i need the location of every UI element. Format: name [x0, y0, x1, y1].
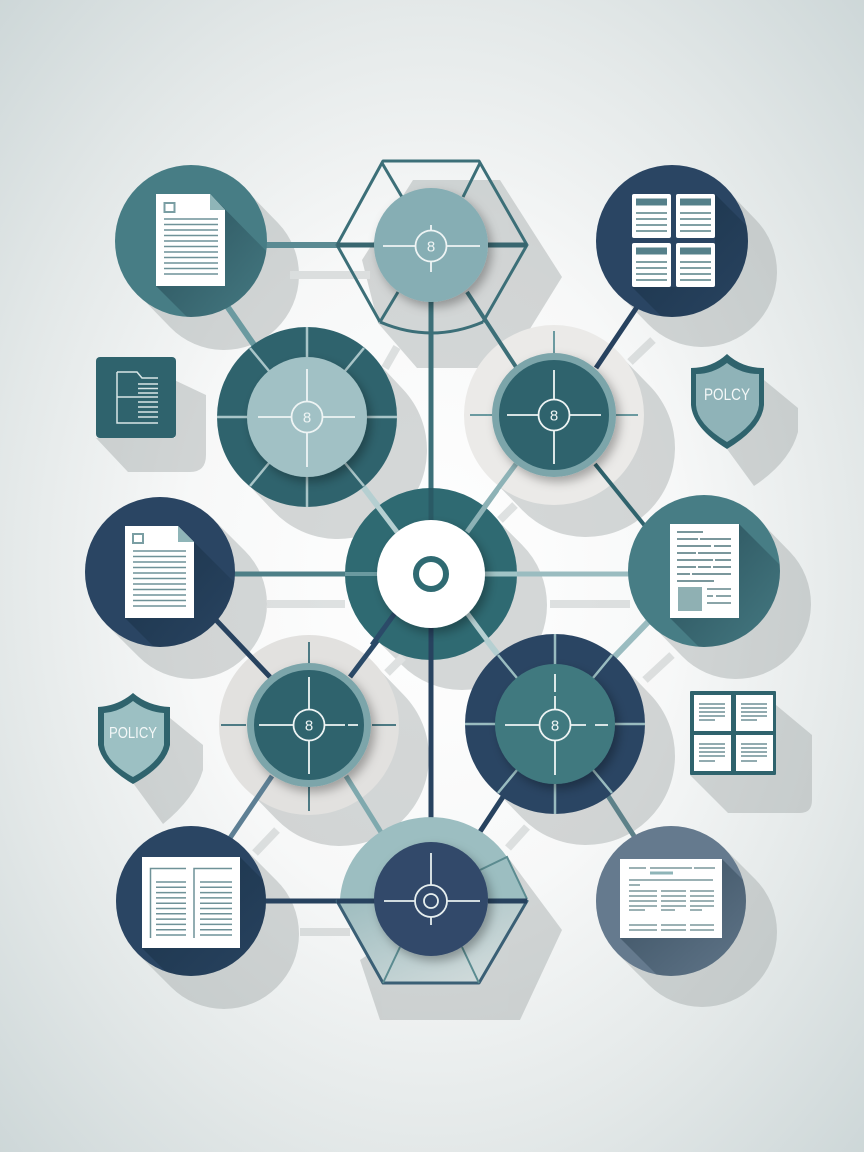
icon: document page: [125, 526, 194, 618]
pale disc: lower left: [219, 635, 399, 815]
document node: left: [85, 497, 235, 647]
grid document node: top right: [596, 165, 748, 317]
icon: target ring: [384, 853, 480, 925]
connector lines: [216, 245, 648, 901]
icon: report page: [620, 859, 722, 938]
document node: top left: [115, 165, 267, 317]
shield badge: left: [98, 693, 170, 784]
icon: target crosshair: [383, 225, 480, 272]
bottom hexagon node: [337, 817, 527, 983]
icon: target crosshair: [259, 677, 358, 774]
ring node: lower left: [221, 642, 396, 811]
icon: target crosshair: 8: [551, 718, 559, 734]
icon: document page: [156, 194, 225, 286]
open book node: bottom left: [116, 826, 266, 976]
ring node: lower right: [465, 634, 645, 814]
pale shadow connector lines: [255, 275, 672, 932]
folder square icon: [96, 357, 176, 438]
icon: target crosshair: 8: [303, 410, 311, 426]
long shadows: [96, 180, 812, 1020]
document node: right: [628, 495, 780, 647]
four panel document icon: [690, 691, 776, 775]
shield badge: left: POLICY: [109, 725, 157, 742]
icon: target crosshair: [505, 674, 608, 775]
report node: bottom right: [596, 826, 746, 976]
icon: target crosshair: 8: [427, 238, 435, 256]
icon: target crosshair: [507, 370, 601, 464]
icon: target crosshair: [258, 369, 355, 467]
shield badge: top right: POLCY: [704, 385, 750, 404]
icon: open book page: [142, 857, 240, 948]
top hexagon node: [337, 161, 527, 333]
icon: article page: [670, 524, 739, 618]
icon: target crosshair: 8: [305, 718, 313, 734]
pale disc: upper right: [464, 325, 644, 505]
icon: target crosshair: 8: [550, 408, 558, 424]
central hub: [345, 488, 517, 660]
shield badge: top right: [691, 354, 764, 449]
ring node: upper left: [217, 327, 397, 507]
ring node: upper right: [470, 331, 638, 477]
icon: four panel page: [632, 194, 715, 287]
